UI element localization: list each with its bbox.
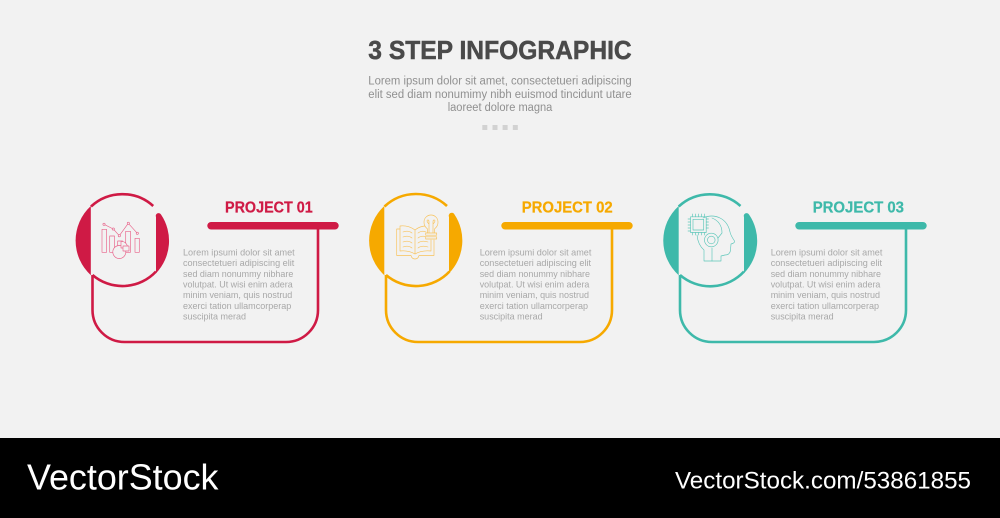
subtitle text block: elit sed diam nonumimy nibh euismod tincidunt utare — [368, 89, 632, 101]
text block: project 02: volutpat. Ut wisi enim adera — [480, 278, 590, 290]
subtitle text block — [368, 76, 632, 114]
text block: project 02: Lorem ipsumi dolor sit amet — [480, 246, 592, 257]
panel: project 02 — [369, 194, 633, 342]
text block: project 02: exerci tation ullamcorperap — [480, 300, 588, 311]
text block: project 01: suscipita merad — [183, 311, 246, 322]
step frame and circle — [76, 194, 339, 342]
text block: project 03 — [771, 246, 883, 322]
step frame and circle — [663, 194, 927, 342]
text block: project 03: suscipita merad — [771, 311, 834, 322]
text block: project 03: sed diam nonummy nibhare — [771, 268, 881, 279]
text block: project 02 — [480, 246, 592, 322]
heading: project 01: PROJECT 01 — [225, 199, 313, 216]
watermark image id: VectorStock.com/53861855 — [675, 468, 971, 495]
panel: project 03 — [663, 194, 927, 342]
panel: project 01 — [76, 194, 339, 342]
text block: project 03: Lorem ipsumi dolor sit amet — [771, 246, 883, 257]
text block: project 01: sed diam nonummy nibhare — [183, 268, 293, 279]
text block: project 01: consectetueri adipiscing elit — [183, 257, 295, 268]
heading: project 02: PROJECT 02 — [522, 199, 613, 216]
text block: project 01: minim veniam, quis nostrud — [183, 289, 292, 300]
text block: project 02: consectetueri adipiscing elit — [480, 257, 591, 268]
text block: project 01: Lorem ipsumi dolor sit amet — [183, 246, 295, 257]
title: 3 STEP INFOGRAPHIC — [368, 35, 632, 65]
subtitle text block: Lorem ipsum dolor sit amet, consectetueri adipiscing — [368, 76, 632, 88]
heading: project 03: PROJECT 03 — [813, 199, 904, 216]
icon: AI head with chip — [688, 214, 735, 261]
text block: project 03: consectetueri adipiscing elit — [771, 257, 882, 268]
icon: open book and light bulb — [397, 215, 438, 259]
watermark band — [0, 438, 1000, 518]
text block: project 03: minim veniam, quis nostrud — [771, 289, 880, 300]
text block: project 03: volutpat. Ut wisi enim adera — [771, 278, 881, 290]
pagination dots — [482, 125, 518, 130]
text block: project 03: exerci tation ullamcorperap — [771, 300, 879, 311]
text block: project 01: exerci tation ullamcorperap — [183, 300, 291, 311]
icon: bar chart with pie — [102, 222, 139, 258]
text block: project 01 — [183, 246, 295, 322]
text block: project 02: sed diam nonummy nibhare — [480, 268, 590, 279]
step frame and circle — [369, 194, 633, 342]
text block: project 02: suscipita merad — [480, 311, 543, 322]
text block: project 01: volutpat. Ut wisi enim adera — [183, 278, 293, 290]
watermark logo: VectorStock — [27, 456, 219, 498]
subtitle text block: laoreet dolore magna — [448, 102, 553, 114]
text block: project 02: minim veniam, quis nostrud — [480, 289, 589, 300]
